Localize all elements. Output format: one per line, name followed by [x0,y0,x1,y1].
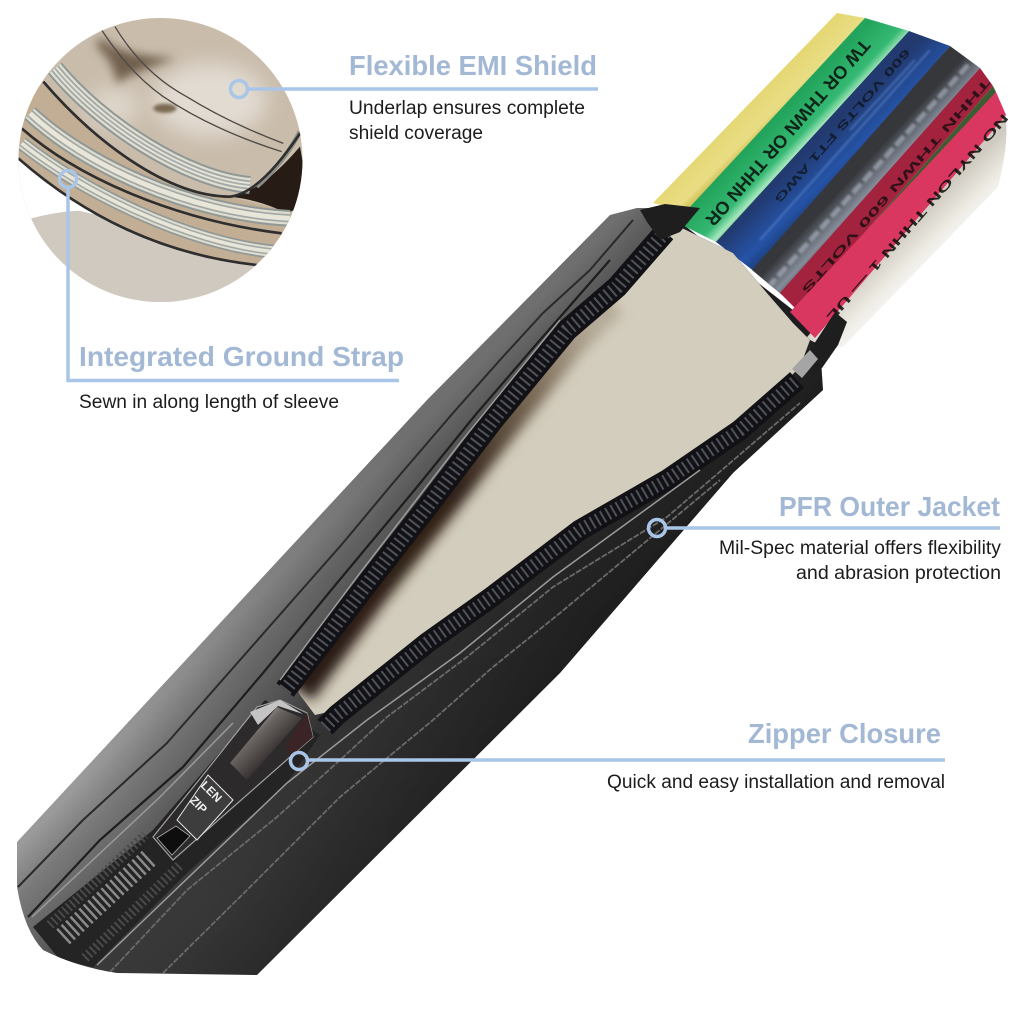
inset fold shadow [97,37,177,83]
heading: Flexible EMI Shield [349,50,597,81]
wire: blue [716,31,950,272]
inset double stitch [102,27,283,152]
inset gray fold [257,132,300,187]
zipper slider [153,700,313,860]
wire: green: TW OR THWN OR THHN OR [702,35,874,230]
inset lower tan layers [0,82,293,265]
heading: Integrated Ground Strap [79,341,404,372]
wire: gray [752,46,980,295]
description: Sewn in along length of sleeve [79,392,339,413]
description: Quick and easy installation and removal [607,772,945,793]
slider body [153,700,313,860]
wire: dark red: THHN THWN 600 VOLTS [799,76,992,295]
outer jacket [17,208,823,975]
description: Mil-Spec material offers flexibility [719,538,1002,559]
cloth shadow [298,300,610,690]
inset upper fabric highlight [87,87,140,127]
inset fabric sheen [153,63,267,137]
slider label plate [177,775,233,840]
inset base fabric [18,18,302,302]
inset braid 1 [55,68,250,185]
callout: Flexible EMI Shield [230,50,598,144]
slider top metal [250,700,303,725]
zipper metal stop [792,350,818,378]
jacket stitching [18,220,800,973]
zipper: lower tape [33,700,320,967]
inset white wedge [18,160,94,232]
sleeve [17,208,823,975]
marker [648,520,666,536]
description: Underlap ensures complete [349,98,585,119]
slider brand text: LEN [198,778,225,805]
wire: yellow [653,13,865,215]
leader line [68,187,399,380]
wire: red: NO NYLON THHN 1 — UL [824,111,1011,324]
description line 2: shield coverage [349,123,483,144]
inset dark corner [234,146,302,212]
zipper: right teeth [325,380,797,727]
zipper frayed end: right [810,312,847,376]
marker [230,80,248,98]
marker [290,752,308,770]
wire shadow backing [668,222,825,365]
heading: PFR Outer Jacket [779,491,1000,522]
slider brand text: ZIP [187,793,210,816]
callout: PFR Outer Jacket [648,491,1002,584]
slider pull [230,707,302,780]
jacket edge highlights [32,320,700,965]
leader line [246,87,598,91]
zipper: left teeth [285,232,665,690]
leader line [666,526,1000,530]
wire: red [790,92,1011,338]
wire: white [800,113,1006,347]
inset lower fabric [32,210,263,302]
wire: dark red [780,68,993,310]
slider tail [157,826,190,855]
slider maroon shade [285,713,313,757]
cable bundle [653,13,1011,365]
inset braid 2 [30,113,290,218]
marker [60,170,76,188]
wire: green stripe [797,86,996,314]
callout: Zipper Closure [290,718,945,793]
inset fold shadow 2 [153,104,177,113]
callout: Integrated Ground Strap [60,170,404,413]
slider brand text [187,778,225,816]
leader line [308,758,945,762]
heading: Zipper Closure [748,718,941,749]
shield cloth [293,228,810,715]
circular detail inset [18,18,302,302]
zipper frayed end: left [640,204,700,240]
inset braid 3 [22,143,273,252]
wire: green [676,18,909,245]
zipper: lower tape texture [50,835,180,958]
zipper: lower teeth [63,857,150,937]
wire: blue: 600 VOLTS FT1 AWG [772,46,912,205]
description line 2: and abrasion protection [796,563,1001,584]
inset dark edges [18,82,300,265]
